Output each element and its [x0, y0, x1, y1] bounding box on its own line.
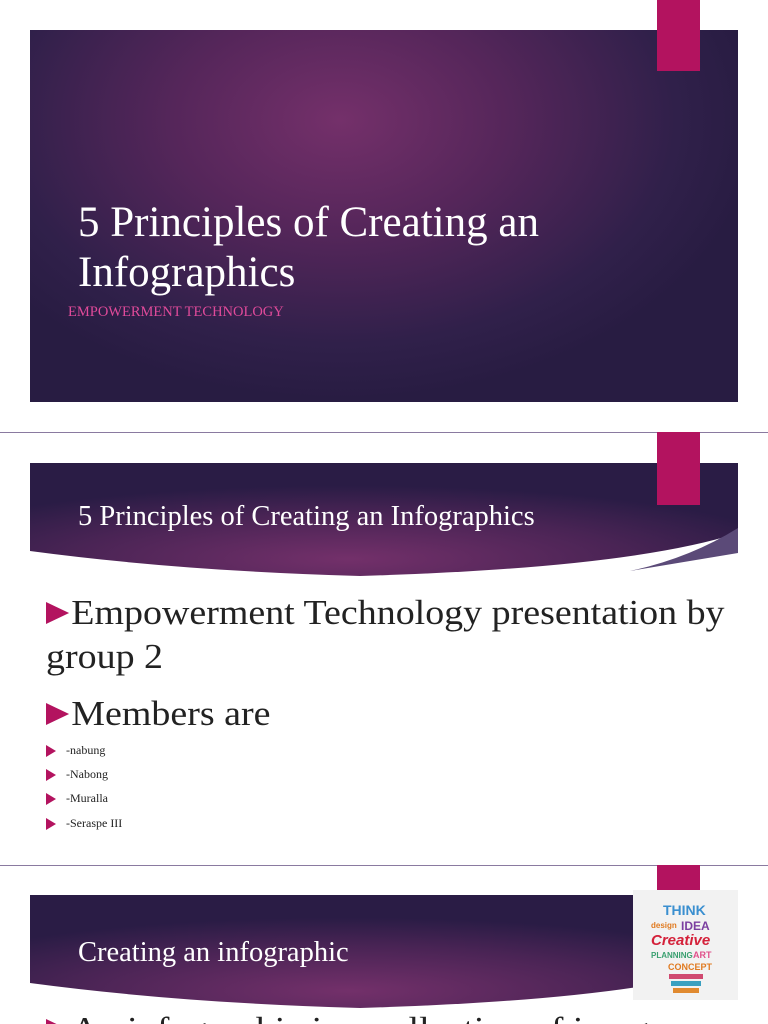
tab: slide 3	[657, 865, 700, 890]
image: creative lightbulb: ART	[693, 950, 712, 960]
slide 2 header banner	[30, 463, 738, 576]
slide 2 heading: 5 Principles of Creating an Infographics	[78, 501, 535, 532]
image: creative lightbulb: CONCEPT	[668, 962, 713, 972]
bullet list: slide 2 body: -Muralla	[66, 791, 108, 805]
image: creative lightbulb: Creative	[651, 932, 710, 949]
bullet list: slide 2 body	[46, 594, 725, 830]
bullet list: slide 2 body: -nabung	[66, 743, 105, 757]
image: creative lightbulb: design	[651, 921, 677, 930]
title: 5 Principles of Creating an Infographics	[78, 199, 539, 296]
image: creative lightbulb	[633, 890, 738, 1000]
slide 3 header banner	[30, 895, 633, 1008]
bullet list: slide 2 body: -Seraspe III	[66, 816, 122, 830]
slide 1: title slide	[30, 30, 738, 402]
image: creative lightbulb: THINK	[663, 902, 706, 918]
bullet list: slide 2 body: Empowerment Technology presentation by group 2	[46, 594, 725, 676]
subtitle: EMPOWERMENT TECHNOLOGY	[68, 304, 284, 320]
bullet list: slide 2 body: -Nabong	[66, 767, 108, 781]
bullet list: slide 2 body: Members are	[71, 695, 270, 733]
image: creative lightbulb: PLANNING	[651, 951, 693, 960]
slide 3 heading: Creating an infographic	[78, 937, 349, 968]
image: creative lightbulb: IDEA	[681, 919, 710, 933]
tab: slide 2	[657, 432, 700, 505]
tab: slide 1	[657, 0, 700, 71]
